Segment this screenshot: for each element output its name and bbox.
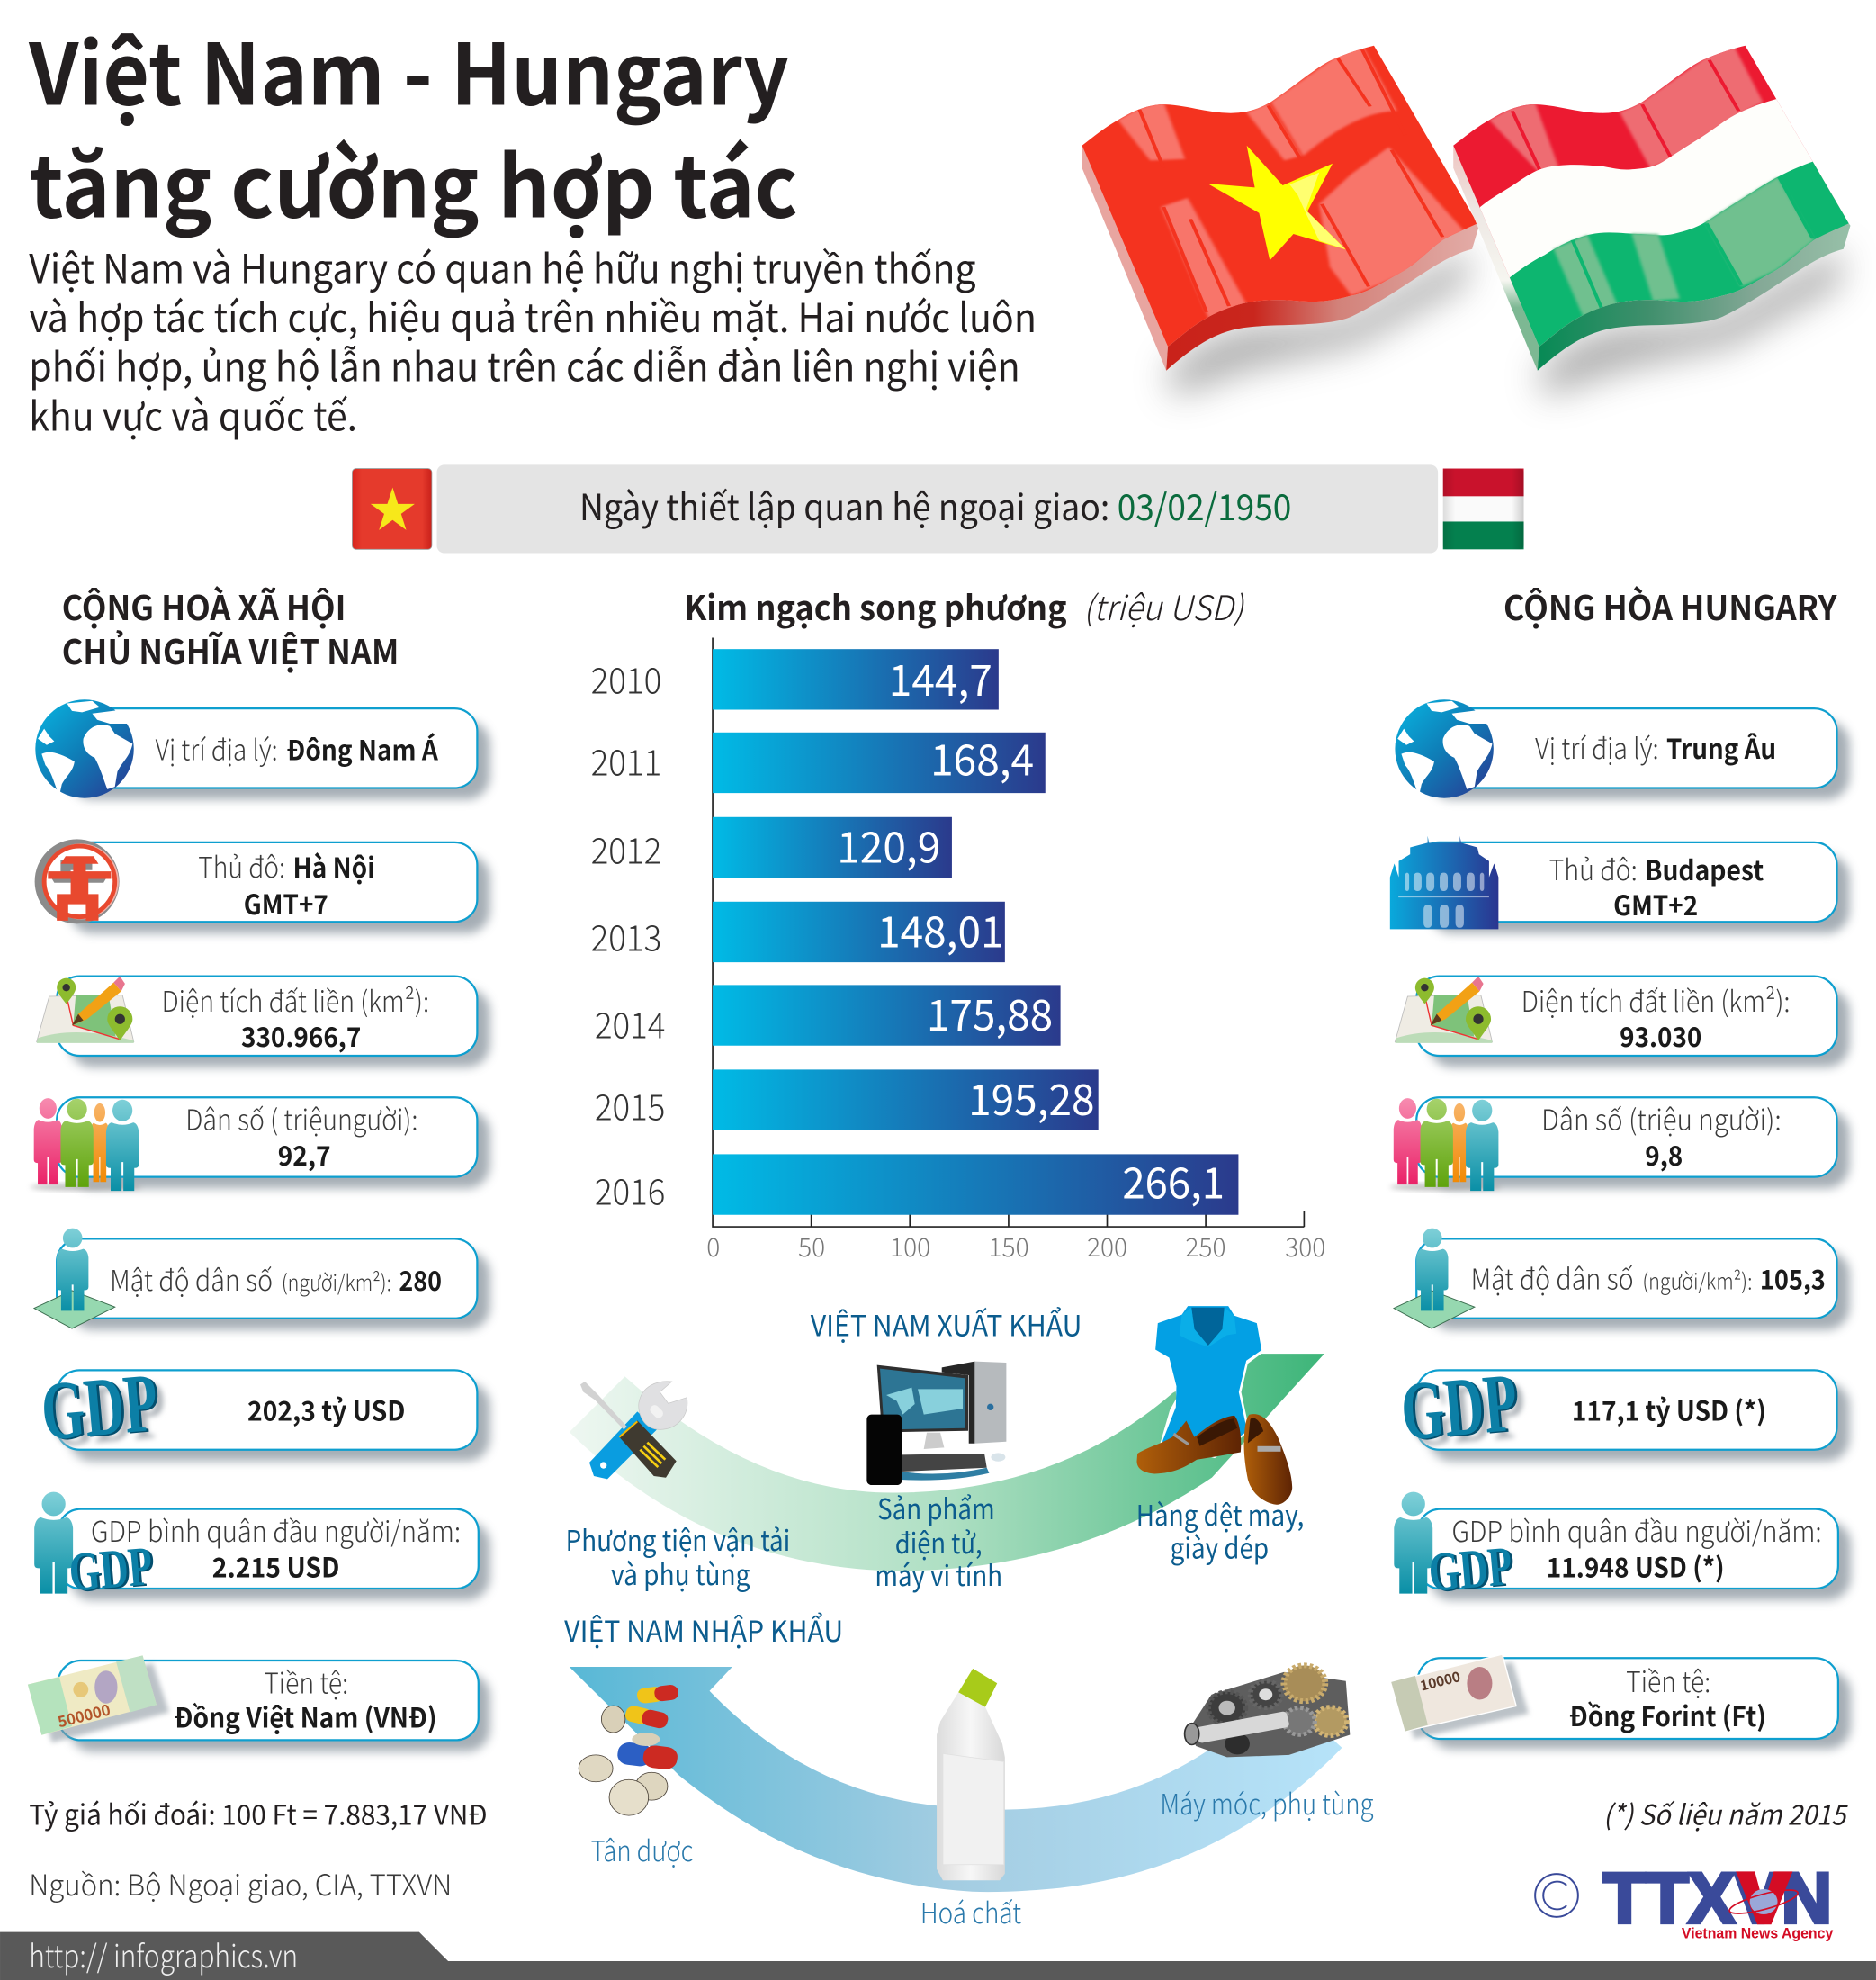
- panel: Hungary location: Vị trí địa lý:: [1535, 726, 1659, 768]
- footnote: (*) Số liệu năm 2015: [1603, 1792, 1848, 1832]
- bar 2015: 2015: [595, 1080, 665, 1131]
- panel shadows left: [69, 721, 489, 1751]
- panel: Hungary capital: Thủ đô:: [1549, 848, 1638, 889]
- panel: Hungary population: Dân số (triệu người):: [1541, 1098, 1782, 1139]
- panel: Hungary GDP per capita: 11.948 USD (*): [1547, 1545, 1725, 1585]
- panel: Vietnam density: (người/km²):: [282, 1266, 391, 1298]
- bar 2012: 120,9: [837, 813, 940, 875]
- panel: Vietnam capital: Hà Nội: [293, 846, 375, 886]
- axis tick labels: 0: [706, 1228, 720, 1264]
- icon: person and GDP: [34, 1492, 157, 1605]
- intro paragraph: phối hợp, ủng hộ lẫn nhau trên các diễn đàn liên nghị viện: [29, 336, 1020, 393]
- icon: computer and phone: [866, 1362, 1006, 1485]
- icon: person and GDP: [1394, 1492, 1517, 1605]
- icon: GDP letters: GDP: [1400, 1357, 1523, 1460]
- icon: GDP letters: GDP: [1405, 1363, 1530, 1465]
- icon: person on plot: [1394, 1228, 1475, 1328]
- axes: [713, 638, 1304, 1227]
- panel: Vietnam currency: Tiền tệ:: [264, 1661, 348, 1703]
- import arrow: [570, 1667, 1342, 1892]
- copyright symbol: [1535, 1874, 1578, 1917]
- bar 2015: [595, 1066, 1099, 1131]
- labels: export goods: Phương tiện vận tải: [566, 1518, 790, 1560]
- bar 2013: [591, 897, 1005, 962]
- bar 2011: 2011: [591, 734, 661, 786]
- icon: map and pencil: [37, 976, 134, 1043]
- labels: export goods: và phụ tùng: [611, 1552, 750, 1594]
- flag shadows: [1166, 249, 1843, 396]
- heading: Vietnam: [62, 580, 399, 674]
- panel: Vietnam area: [37, 976, 477, 1056]
- icon: chemical bottle: [937, 1669, 1005, 1880]
- panel: Hungary location: [1395, 699, 1836, 798]
- labels: import goods: Máy móc, phụ tùng: [1160, 1782, 1374, 1823]
- labels: export goods: giày dép: [1171, 1526, 1269, 1567]
- panel: Hungary area: [1395, 976, 1836, 1056]
- bar 2014: 175,88: [927, 981, 1053, 1043]
- labels: import goods: Tân dược: [591, 1829, 693, 1870]
- icon: GDP letters: GDP: [40, 1357, 164, 1460]
- panel: Vietnam capital: Thủ đô:: [198, 845, 285, 886]
- icon: people: [31, 1098, 141, 1191]
- icon: tools: [580, 1382, 687, 1479]
- panel: Hungary currency: Đồng Forint (Ft): [1569, 1695, 1766, 1734]
- labels: import goods: Hoá chất: [920, 1891, 1021, 1932]
- bar 2016: [595, 1149, 1238, 1216]
- panel: Vietnam GDP per capita: 2.215 USD: [212, 1545, 339, 1585]
- labels: export goods: [566, 1487, 1304, 1595]
- title: Việt Nam - Hungary: [28, 7, 789, 130]
- flag: Vietnam: [1082, 45, 1479, 371]
- icon: pills: [579, 1684, 679, 1815]
- chart heading: (triệu USD): [1083, 580, 1245, 630]
- panel: Vietnam area: 330.966,7: [241, 1015, 361, 1055]
- axis tick labels: [706, 1228, 1325, 1264]
- title: tăng cường hợp tác: [29, 120, 798, 242]
- panel: Vietnam GDP per capita: [34, 1492, 479, 1605]
- icon: banknote 500000: [28, 1655, 169, 1742]
- panel: Vietnam population: 92,7: [278, 1134, 331, 1174]
- title: [28, 7, 798, 242]
- chart heading: Kim ngạch song phương: [684, 580, 1067, 630]
- intro paragraph: khu vực và quốc tế.: [29, 384, 357, 442]
- small flag: Hungary: [1443, 469, 1524, 549]
- panel: Vietnam currency: [28, 1655, 479, 1742]
- footer band: [0, 1931, 1876, 1980]
- icon: person and GDP: GDP: [1426, 1535, 1514, 1604]
- logo: TTXVN: TTXVN: [1603, 1858, 1832, 1938]
- intro paragraph: [29, 237, 1037, 442]
- bar 2012: [591, 813, 952, 878]
- icon: GDP letters: [38, 1355, 170, 1466]
- panel: Hungary GDP: [1397, 1355, 1836, 1466]
- icon: GDP letters: GDP: [1397, 1356, 1521, 1459]
- date bar: Ngày thiết lập quan hệ ngoại giao:: [579, 479, 1109, 531]
- bar 2011: 168,4: [930, 725, 1034, 788]
- exchange rate: Tỷ giá hối đoái: 100 Ft = 7.883,17 VNĐ: [29, 1792, 488, 1832]
- icon: person on plot: [34, 1228, 115, 1328]
- panel: Hungary capital: [1390, 836, 1836, 929]
- bar chart: [591, 638, 1325, 1264]
- import section: [564, 1609, 1374, 1932]
- icon: polo shirt: [1153, 1304, 1264, 1458]
- panel: Hungary GDP per capita: GDP bình quân đầu người/năm:: [1452, 1509, 1822, 1551]
- import heading: VIỆT NAM NHẬP KHẨU: [564, 1609, 843, 1651]
- panel: Vietnam location: Vị trí địa lý:: [156, 728, 278, 770]
- axis tick labels: 50: [798, 1228, 825, 1264]
- panel: Vietnam area: Diện tích đất liền (km²):: [162, 979, 429, 1021]
- bar 2010: 144,7: [889, 646, 992, 708]
- axis tick labels: 200: [1087, 1228, 1127, 1264]
- bar 2015: 195,28: [968, 1066, 1094, 1128]
- bar 2014: 2014: [595, 997, 665, 1048]
- axis tick labels: 300: [1285, 1228, 1325, 1264]
- date bar: 03/02/1950: [1118, 479, 1291, 531]
- icon: GDP letters: GDP: [46, 1363, 170, 1465]
- icon: shoes: [1136, 1414, 1292, 1505]
- bar 2010: [591, 646, 999, 710]
- panel: Hungary GDP per capita: [1394, 1492, 1838, 1605]
- icon: person and GDP: GDP: [69, 1536, 157, 1605]
- panel: Vietnam currency: Đồng Việt Nam (VNĐ): [175, 1696, 436, 1735]
- icon: person and GDP: GDP: [67, 1535, 155, 1604]
- icon: Budapest building: [1390, 836, 1498, 929]
- source: Nguồn: Bộ Ngoại giao, CIA, TTXVN: [29, 1863, 452, 1904]
- panel: Hungary density: Mật độ dân số: [1471, 1257, 1634, 1299]
- panel: Hungary currency: Tiền tệ:: [1626, 1660, 1710, 1701]
- small flag: Vietnam: [352, 469, 432, 549]
- labels: export goods: máy vi tính: [875, 1553, 1002, 1595]
- date bar: [436, 464, 1438, 554]
- bar 2012: 2012: [591, 824, 661, 875]
- labels: export goods: Sản phẩm: [877, 1487, 995, 1528]
- icon: GDP letters: GDP: [38, 1356, 161, 1459]
- labels: import goods: [591, 1782, 1374, 1932]
- bar 2016: 2016: [595, 1165, 665, 1216]
- panel: Vietnam GDP per capita: GDP bình quân đầu người/năm:: [91, 1509, 461, 1551]
- icon: machine gears: [1185, 1665, 1350, 1757]
- diplomatic relations bar: [352, 464, 1524, 554]
- bar 2014: [595, 981, 1061, 1048]
- heading: Hungary: CỘNG HÒA HUNGARY: [1503, 580, 1837, 630]
- panel: Vietnam GDP: [38, 1355, 477, 1466]
- footer band: http:// infographics.vn: [29, 1931, 298, 1977]
- icon: people: [1390, 1098, 1501, 1191]
- icon: banknote 500000: 500000: [55, 1697, 112, 1732]
- labels: export goods: điện tử,: [895, 1521, 983, 1562]
- waving 3D flags: [1082, 45, 1876, 396]
- panel: Hungary population: 9,8: [1645, 1134, 1683, 1174]
- labels: export goods: Hàng dệt may,: [1136, 1493, 1304, 1534]
- axis tick labels: 100: [890, 1228, 930, 1264]
- export heading: VIỆT NAM XUẤT KHẨU: [811, 1303, 1082, 1345]
- panel: Hungary area: 93.030: [1620, 1015, 1701, 1055]
- icon: GDP letters: [1397, 1355, 1530, 1466]
- panel: Vietnam capital: [35, 839, 477, 923]
- panel: Vietnam density: Mật độ dân số: [110, 1258, 273, 1300]
- logo: TTXVN: Vietnam News Agency: [1682, 1925, 1834, 1942]
- bar 2011: [591, 725, 1046, 793]
- panel: Hungary capital: Budapest: [1645, 849, 1764, 888]
- heading: Vietnam: CỘNG HOÀ XÃ HỘI: [62, 580, 346, 630]
- panel: Vietnam capital: GMT+7: [244, 883, 328, 922]
- panel: Vietnam density: [34, 1228, 477, 1328]
- panel: Hungary currency: [1391, 1654, 1838, 1739]
- icon: map and pencil: [1395, 976, 1492, 1043]
- panel shadows right: [1429, 721, 1851, 1749]
- icon: person and GDP: GDP: [1429, 1536, 1517, 1605]
- heading: Vietnam: CHỦ NGHĨA VIỆT NAM: [62, 625, 399, 674]
- panel: Vietnam density: 280: [399, 1259, 442, 1299]
- panel: Hungary GDP: 117,1 tỷ USD (*): [1572, 1389, 1766, 1428]
- export arrow: [570, 1354, 1324, 1570]
- panel: Vietnam population: [31, 1097, 477, 1191]
- icon: Hanoi emblem: [35, 839, 120, 923]
- icon: globe: [35, 699, 134, 798]
- intro paragraph: và hợp tác tích cực, hiệu quả trên nhiều mặt. Hai nước luôn: [29, 286, 1037, 344]
- panel: Vietnam GDP: 202,3 tỷ USD: [247, 1389, 405, 1428]
- panel: Vietnam population: Dân số ( triệungười):: [185, 1098, 417, 1139]
- panel: Hungary population: [1390, 1097, 1836, 1191]
- flag: Hungary: [1453, 45, 1850, 371]
- panel: Hungary location: Trung Âu: [1666, 727, 1776, 767]
- bar 2016: 266,1: [1122, 1149, 1225, 1211]
- panel: Hungary density: 105,3: [1760, 1258, 1826, 1298]
- panel: Vietnam location: Đông Nam Á: [287, 729, 439, 769]
- bar 2013: 2013: [591, 911, 661, 962]
- panel: Hungary density: [1394, 1228, 1836, 1328]
- panel: Hungary area: Diện tích đất liền (km²):: [1521, 979, 1791, 1021]
- icon: banknote 10000: [1391, 1654, 1529, 1739]
- icon: globe: [1395, 699, 1494, 798]
- axis tick labels: 150: [989, 1228, 1029, 1264]
- panel: Vietnam location: [35, 699, 477, 798]
- bar 2013: 148,01: [877, 897, 1003, 959]
- icon: banknote 10000: 10000: [1418, 1666, 1462, 1696]
- panel: Hungary density: (người/km²):: [1642, 1265, 1752, 1297]
- intro paragraph: Việt Nam và Hungary có quan hệ hữu nghị truyền thống: [29, 237, 976, 294]
- bar 2010: 2010: [591, 652, 661, 704]
- panel: Hungary capital: GMT+2: [1613, 884, 1698, 923]
- axis tick labels: 250: [1185, 1228, 1225, 1264]
- export section: [566, 1303, 1324, 1595]
